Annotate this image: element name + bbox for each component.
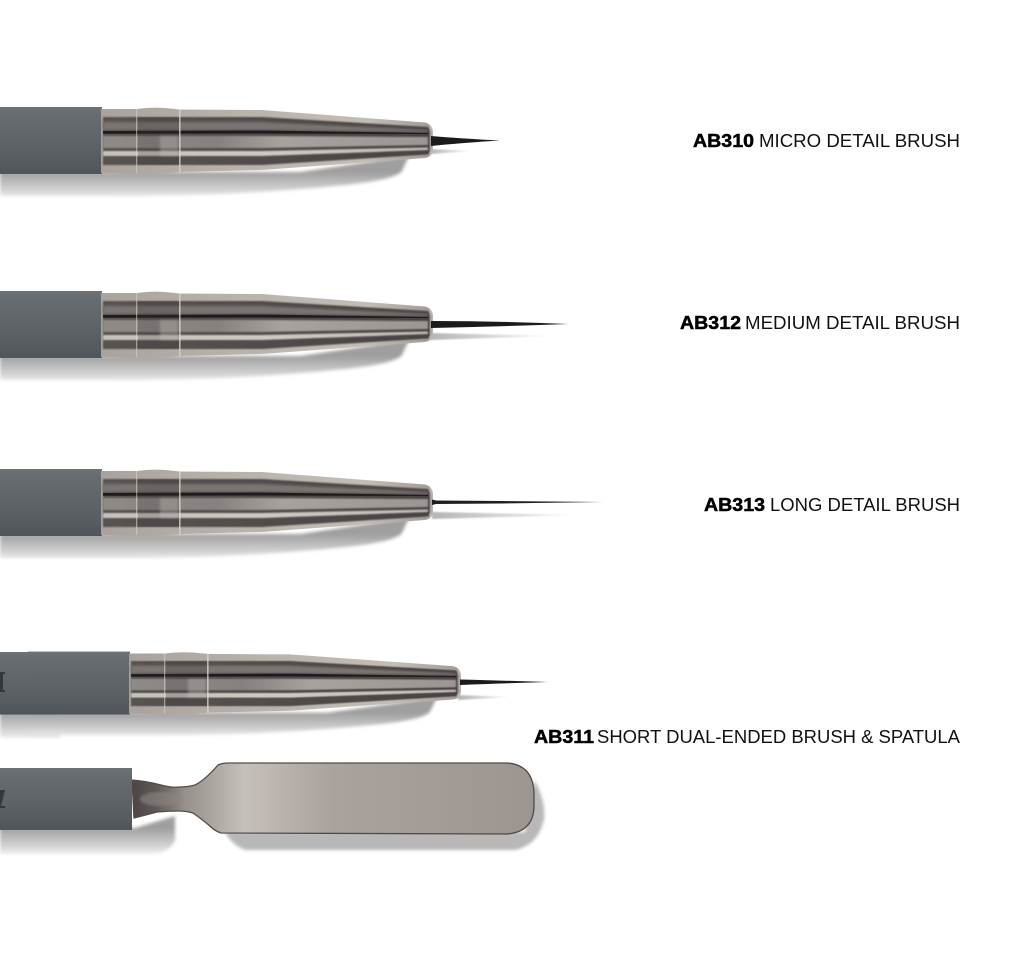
label: AB312 medium detail brush: AB312: [680, 312, 741, 333]
brush: AB312 medium detail: [0, 291, 568, 380]
label: AB313 long detail brush: LONG DETAIL BRUSH: [770, 494, 960, 515]
label: AB310 micro detail brush: AB310: [693, 130, 754, 151]
brush: AB310 micro detail: [0, 107, 500, 196]
label: AB310 micro detail brush: MICRO DETAIL BRUSH: [759, 130, 960, 151]
spatula blade: [132, 763, 534, 834]
handle logo mark: [0, 672, 5, 692]
label: AB311 short dual-ended brush and spatula: AB311: [534, 726, 594, 747]
brush: AB311 dual-ended, spatula end: [0, 763, 544, 854]
label: AB313 long detail brush: AB313: [704, 494, 765, 515]
label: AB312 medium detail brush: MEDIUM DETAIL BRUSH: [745, 312, 960, 333]
bristle tip: [460, 680, 548, 685]
brush: AB311 dual-ended, brush end: [0, 652, 548, 738]
handle logo mark: [0, 790, 5, 808]
label: AB311 short dual-ended brush and spatula: SHORT DUAL-ENDED BRUSH & SPATULA: [597, 726, 961, 747]
brush: AB313 long detail: [0, 469, 603, 558]
handle extension: [0, 652, 30, 715]
neck highlight: [140, 792, 180, 806]
spatula shadow: [0, 780, 544, 854]
